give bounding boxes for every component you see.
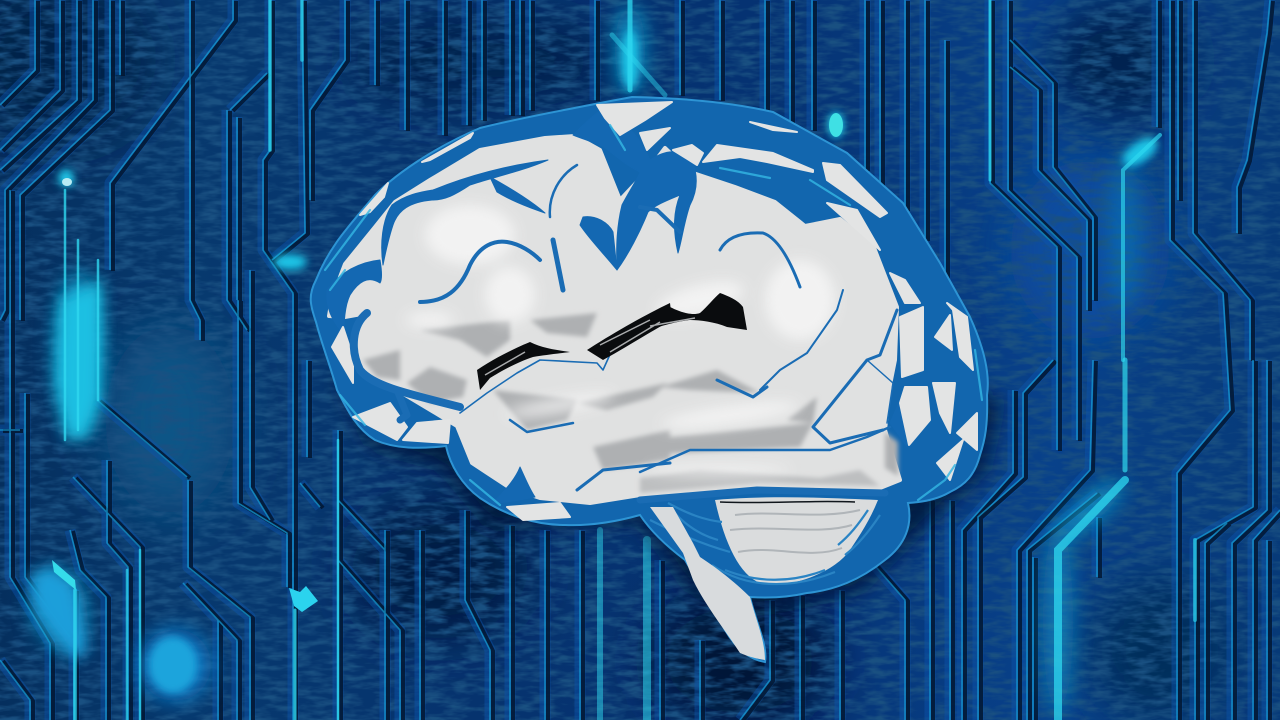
- brain: dark lateral fissure: [477, 293, 747, 390]
- brain: grey chrome shading: [363, 313, 898, 493]
- brain: thin blue fold lines: [354, 165, 897, 500]
- brain: silver gyri pieces on blue rim: [332, 102, 977, 520]
- brain: white chrome sheen: [405, 205, 835, 475]
- brain: fissure silver flecks: [485, 318, 695, 375]
- brain: blue silhouette: [311, 97, 988, 662]
- brain: [311, 97, 1000, 662]
- brain: drop shadow: [340, 300, 1000, 610]
- brain: cyan glints on blue rim: [325, 125, 982, 505]
- brain: silver cortex: [329, 136, 900, 503]
- brain: blue sulci folds: [327, 108, 907, 503]
- brain: stem: [650, 507, 765, 660]
- brain: cerebellum: [650, 497, 880, 585]
